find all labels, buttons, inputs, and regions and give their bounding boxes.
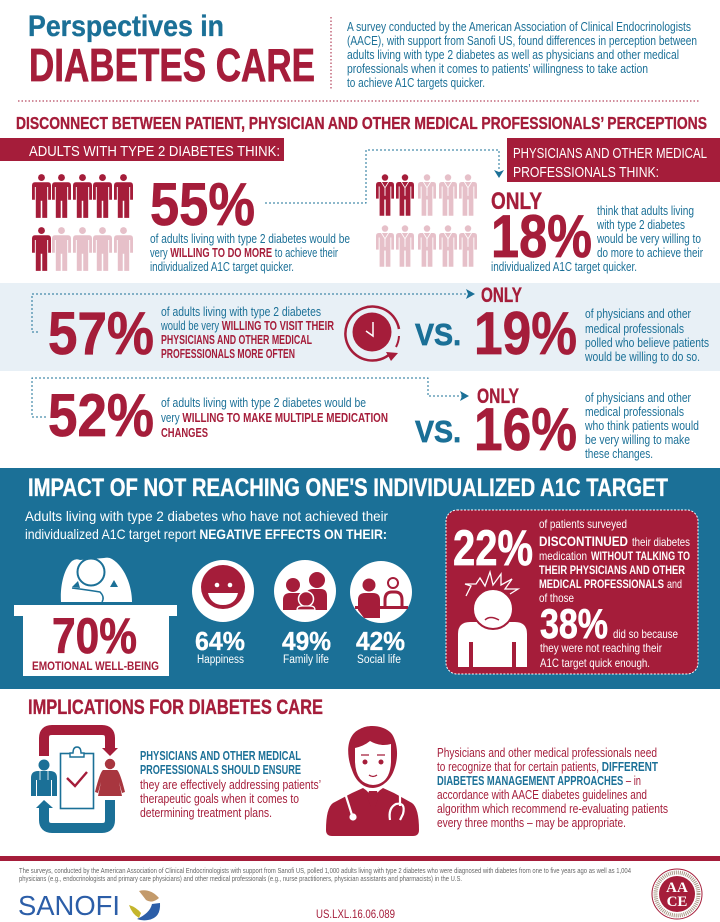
- people: physicians 18%: [376, 174, 477, 267]
- text: 52% description: of adults living with type 2 diabetes would be: [161, 396, 366, 410]
- logo: AACE seal: CE: [667, 894, 687, 910]
- text: 16% description: who think patients would: [584, 419, 699, 433]
- text: discontinued: of patients surveyed: [539, 517, 627, 531]
- text: discontinued: their diabetes: [632, 535, 690, 549]
- icon: slumped person at desk: [14, 558, 177, 676]
- stat: 42% social life: Social life: [357, 654, 401, 666]
- people: adults 55%: [32, 174, 133, 271]
- text: 19% description: medical professionals: [585, 322, 684, 336]
- banner: adults think: [0, 138, 284, 161]
- stat: 70% emotional well-being: 70%: [52, 608, 137, 664]
- stat: only 16%: ONLY: [477, 385, 519, 408]
- panel: medication changes comparison: [32, 378, 699, 463]
- arrow: 55% to physicians: [265, 150, 504, 203]
- text: physicians should ensure: they are effectively addressing patients’: [140, 778, 321, 792]
- text: different approaches: accordance with AACE diabetes guidelines and: [437, 787, 647, 802]
- text: 57% description: would be very WILLING TO VISIT THEIR: [160, 319, 334, 333]
- text: physicians should ensure: [140, 749, 321, 820]
- icon: care cycle: [31, 730, 125, 828]
- icon: clock: [345, 307, 399, 361]
- text: reason: [540, 627, 678, 670]
- text: 57% description: [160, 305, 334, 361]
- intro text: [347, 20, 697, 90]
- text: 18% description: with type 2 diabetes: [596, 218, 685, 232]
- intro text: professionals when it comes to patients’ willingness to take action: [347, 62, 648, 76]
- text: discontinued: of those: [539, 591, 574, 605]
- stat: 70% emotional well-being: EMOTIONAL WELL-BEING: [32, 661, 159, 673]
- label: vs: VS.: [415, 414, 461, 449]
- arrow: red cycle arrow: [44, 730, 118, 756]
- text: 52% description: [161, 396, 388, 440]
- arrow: 57% to 19%: [32, 289, 475, 332]
- logo: Sanofi: SANOFI: [18, 890, 120, 921]
- intro text: to achieve A1C targets quicker.: [347, 76, 485, 90]
- icon: doctor with stethoscope: [326, 726, 419, 836]
- text: 55% description: individualized A1C target quicker.: [150, 260, 294, 274]
- stat: 49% family life: 49%: [282, 626, 331, 656]
- text: 18% description: individualized A1C target quicker.: [491, 260, 637, 274]
- icon: clipboard: [60, 747, 94, 808]
- icon: frustrated person: [458, 572, 527, 667]
- text: 19% description: would be willing to do so.: [584, 350, 700, 364]
- stat: 64% happiness: 64%: [195, 626, 245, 656]
- text: 19% description: of physicians and other: [585, 307, 691, 321]
- text: 18% description: [491, 204, 703, 274]
- text: discontinued: DISCONTINUED: [539, 533, 628, 549]
- stat: 42% social life: 42%: [356, 626, 405, 656]
- stat: 38%: 38%: [540, 600, 608, 647]
- text: 57% description: PROFESSIONALS MORE OFTEN: [161, 347, 295, 361]
- stat: 70% emotional well-being: [32, 608, 159, 673]
- subheading: [25, 508, 388, 542]
- title: Perspectives in: [28, 10, 224, 43]
- icon: smiling face: [192, 560, 254, 622]
- text: 18% description: think that adults living: [597, 204, 694, 218]
- stat: 49% family life: Family life: [283, 654, 329, 666]
- stat: only 19%: ONLY: [481, 284, 522, 307]
- text: discontinued: MEDICAL PROFESSIONALS: [539, 577, 664, 591]
- text: physicians should ensure: therapeutic goals when it comes to: [140, 792, 299, 806]
- text: 16% description: medical professionals: [585, 405, 684, 419]
- text: 16% description: these changes.: [585, 447, 653, 461]
- title: [28, 10, 315, 91]
- logo: AACE seal: [652, 869, 702, 919]
- document code: US.LXL.16.06.089: [316, 907, 395, 921]
- stat: only 16%: 16%: [474, 396, 577, 463]
- footnote: [19, 868, 631, 883]
- label: vs: VS.: [415, 317, 461, 352]
- icon: family: [274, 560, 336, 622]
- text: physicians should ensure: PROFESSIONALS SHOULD ENSURE: [140, 763, 301, 777]
- icon: social: [350, 561, 412, 623]
- banner: adults think: ADULTS WITH TYPE 2 DIABETES THINK:: [29, 143, 280, 160]
- icon: woman patient: [95, 759, 125, 796]
- text: 55% description: [150, 232, 350, 274]
- text: different approaches: [437, 745, 668, 830]
- text: different approaches: Physicians and other medical professionals need: [437, 745, 657, 760]
- heading: implications: IMPLICATIONS FOR DIABETES CARE: [28, 696, 323, 719]
- text: 52% description: CHANGES: [161, 426, 208, 440]
- stat: 64% happiness: Happiness: [197, 654, 244, 666]
- text: different approaches: DIABETES MANAGEMENT APPROACHES – in: [437, 773, 641, 788]
- text: reason: did so because: [613, 627, 678, 641]
- title: DIABETES CARE: [29, 39, 315, 91]
- stat: 57%: 57%: [48, 300, 154, 367]
- arrow: 52% to 16%: [32, 378, 469, 417]
- text: 57% description: of adults living with type 2 diabetes: [161, 305, 321, 319]
- banner: physicians think: [507, 138, 720, 182]
- text: different approaches: to recognize that for certain patients, DIFFERENT: [437, 759, 658, 774]
- text: 55% description: of adults living with type 2 diabetes would be: [150, 232, 350, 246]
- banner: physicians think: PROFESSIONALS THINK:: [513, 164, 659, 181]
- arrow: blue cycle arrow: [36, 800, 110, 828]
- stat: 55%: 55%: [150, 171, 255, 238]
- text: 16% description: [584, 391, 699, 461]
- text: discontinued: medication: [539, 549, 587, 563]
- text: 16% description: of physicians and other: [585, 391, 691, 405]
- text: 57% description: PHYSICIANS AND OTHER MEDICAL: [161, 333, 312, 347]
- stat: 22%: 22%: [453, 520, 533, 576]
- panel: visit physicians comparison: [0, 283, 720, 371]
- subheading: individualized A1C target report NEGATIVE EFFECTS ON THEIR:: [25, 526, 387, 542]
- text: reason: A1C target quick enough.: [540, 656, 650, 670]
- stat: only 18%: ONLY: [491, 188, 542, 215]
- text: reason: they were not reaching their: [540, 641, 662, 655]
- text: physicians should ensure: PHYSICIANS AND OTHER MEDICAL: [140, 749, 301, 763]
- text: physicians should ensure: determining treatment plans.: [140, 806, 272, 820]
- stat: only 18%: 18%: [491, 203, 592, 270]
- text: discontinued: and: [667, 577, 682, 591]
- subheading: Adults living with type 2 diabetes who have not achieved their: [25, 508, 388, 524]
- panel: impact: [0, 468, 720, 689]
- logo: AACE seal: AA: [666, 880, 688, 896]
- text: 16% description: be very willing to make: [585, 433, 690, 447]
- footnote: physicians (e.g., endocrinologists and primary care physicians) and other medical professionals (e.g., nurse practitioners, physician assistants and pharmacists) in the U.S.: [19, 876, 462, 883]
- stat: only 19%: 19%: [474, 300, 577, 367]
- text: 55% description: very WILLING TO DO MORE to achieve their: [150, 246, 338, 260]
- text: 52% description: very WILLING TO MAKE MULTIPLE MEDICATION: [161, 411, 388, 425]
- text: discontinued: [539, 517, 690, 605]
- stat: 52%: 52%: [48, 382, 154, 449]
- text: 19% description: [584, 307, 709, 364]
- icon: doctor: [31, 760, 57, 796]
- text: different approaches: algorithm which recommend re-evaluating patients: [437, 801, 668, 816]
- text: discontinued: WITHOUT TALKING TO: [591, 549, 690, 563]
- callout: discontinued medication: [446, 510, 698, 674]
- text: different approaches: every three months – may be appropriate.: [437, 815, 626, 830]
